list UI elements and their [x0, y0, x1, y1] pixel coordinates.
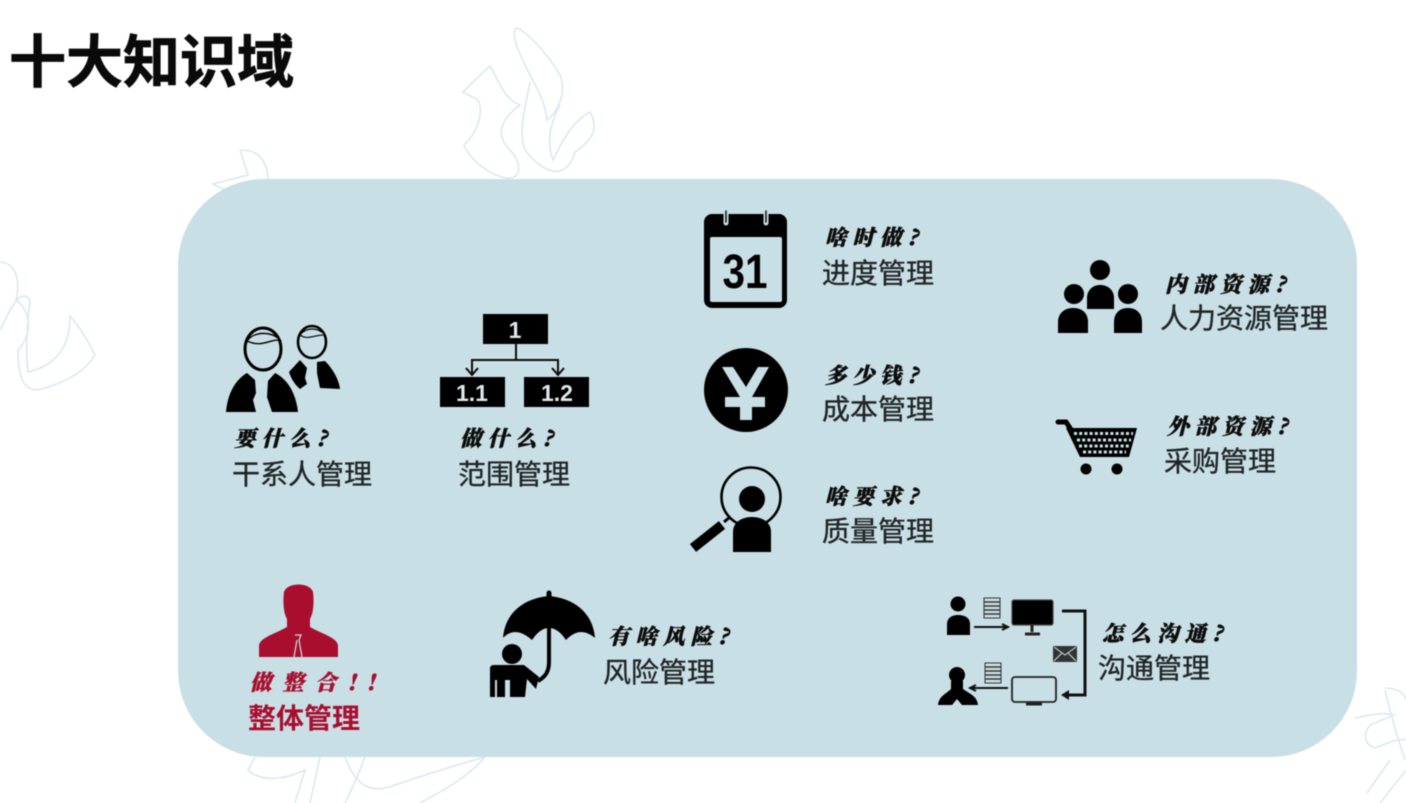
icon: calendar: [704, 211, 787, 308]
panel: knowledge areas: [178, 179, 1357, 757]
icon: person with umbrella: [490, 593, 595, 697]
item: procurement management: [1058, 410, 1294, 477]
label: 质量管理: [822, 516, 934, 547]
item: scope management: [440, 314, 589, 490]
icon: two businessmen: [226, 326, 340, 412]
icon: red manager: [259, 584, 338, 657]
question: 多少钱?: [825, 359, 924, 390]
icon: hierarchy chart: 1.1: [456, 380, 488, 406]
label: 进度管理: [822, 258, 934, 289]
question: 做什么?: [460, 422, 559, 453]
question: 啥时做?: [825, 221, 924, 252]
item: cost management: [704, 348, 934, 432]
icon: hierarchy chart: 1: [509, 317, 522, 343]
icon: shopping cart: [1058, 422, 1137, 474]
item: human resource management: [1058, 260, 1328, 334]
item: integration management: [248, 584, 386, 734]
title: 十大知识域: [9, 31, 294, 95]
label: 整体管理: [248, 703, 360, 734]
question: 外部资源?: [1166, 410, 1294, 441]
label: 采购管理: [1164, 446, 1276, 477]
item: schedule management: [704, 211, 934, 308]
icon: group of people: [1058, 260, 1142, 333]
icon: hierarchy chart: [440, 314, 589, 407]
question: 内部资源?: [1165, 268, 1292, 299]
label: 人力资源管理: [1160, 303, 1328, 334]
icon: communication diagram: [938, 596, 1085, 705]
label: 成本管理: [822, 394, 934, 425]
label: 沟通管理: [1098, 653, 1210, 684]
icon: calendar: 31: [722, 246, 768, 299]
item: stakeholder management: [226, 326, 372, 490]
icon: yuan coin: [704, 348, 788, 432]
question: 做整合!!: [250, 666, 386, 697]
icon: hierarchy chart: 1.2: [541, 380, 573, 406]
item: risk management: [490, 593, 735, 697]
question: 要什么?: [234, 422, 333, 453]
label: 干系人管理: [232, 459, 372, 490]
item: quality management: [693, 468, 934, 552]
item: communications management: [938, 596, 1229, 705]
question: 怎么沟通?: [1102, 617, 1229, 648]
question: 有啥风险?: [608, 620, 735, 651]
icon: magnifier over person: [693, 468, 780, 552]
label: 范围管理: [458, 459, 570, 490]
label: 风险管理: [603, 657, 715, 688]
question: 啥要求?: [825, 480, 924, 511]
